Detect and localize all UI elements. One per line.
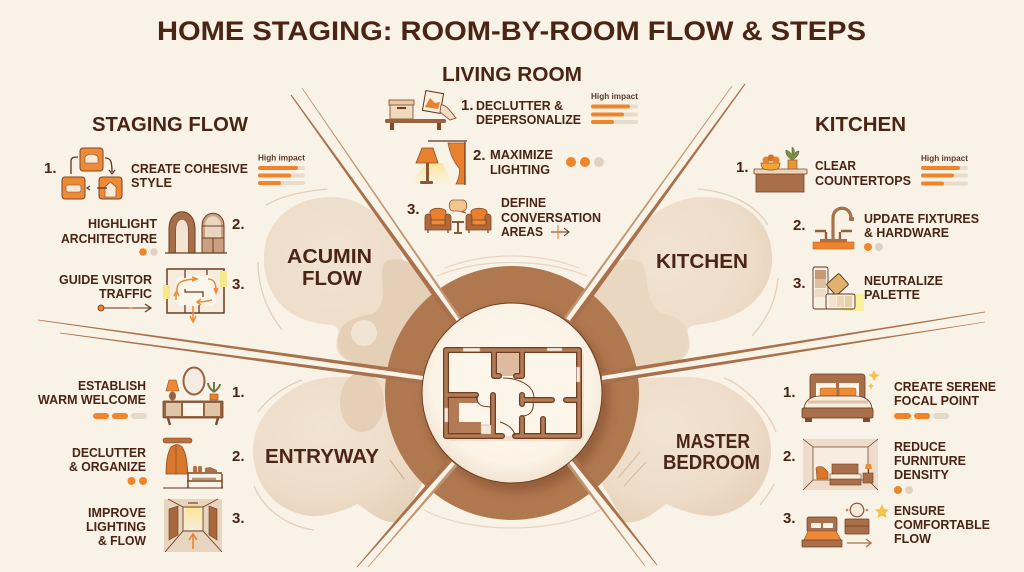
icon: arch and cabinet [165,212,227,253]
blob: Acumin Flow zone [258,189,436,372]
step 3: define conversation areas [407,195,601,239]
icon: bed with sparkles [802,370,880,422]
step 3: define conversation areas: CONVERSATION [501,210,601,225]
step 2: reduce furniture density [783,439,966,494]
step 1: create cohesive style [44,148,305,199]
impact meter: high [258,152,305,185]
step 3: neutralize palette: PALETTE [864,287,920,302]
step 3: guide visitor traffic: TRAFFIC [99,286,153,301]
step 1: create cohesive style: 1. [44,160,57,177]
step 1: declutter and depersonalize [385,91,638,130]
step 2: declutter and organize [69,438,245,488]
blob: Kitchen zone [590,189,778,372]
step 2: maximize lighting: LIGHTING [490,162,550,177]
arrow [551,225,569,239]
step 2: update fixtures and hardware: UPDATE FIXTURES [864,211,979,226]
label: Master Bedroom: BEDROOM [663,451,760,474]
step 3: improve lighting and flow: 3. [232,510,245,527]
step 1: establish warm welcome: 1. [232,384,245,401]
icon: floor plan [444,348,584,441]
panel: staging flow [44,113,305,322]
spokes [38,82,985,567]
step 2: update fixtures and hardware [793,208,979,251]
panel: master bedroom [783,370,996,547]
step 3: improve lighting and flow: & FLOW [98,533,147,548]
icon: uncluttered room [803,439,878,490]
label: Entryway: ENTRYWAY [265,445,379,468]
step 3: improve lighting and flow [86,499,245,552]
step 3: ensure comfortable flow: COMFORTABLE [894,517,990,532]
step 1: create serene focal point: CREATE SERENE [894,379,996,394]
step 1: clear countertops: 1. [736,159,749,176]
icon: coat and shoe rack [163,438,223,488]
step 2: maximize lighting: 2. [473,147,486,164]
step 2: reduce furniture density: DENSITY [894,467,949,482]
step 2: declutter and organize: DECLUTTER [72,445,147,460]
label: Acumin Flow [287,245,372,290]
label: Acumin Flow: ACUMIN [287,245,372,268]
rating pills [894,413,949,419]
step 1: clear countertops [736,147,968,192]
heading: staging flow: STAGING FLOW [92,113,249,136]
icon: faucet [813,208,854,249]
step 2: highlight architecture: 2. [232,216,245,233]
label: Master Bedroom: MASTER [676,430,750,453]
rating dots [894,486,913,494]
step 1: establish warm welcome: ESTABLISH [78,378,146,393]
icon: lamp and curtain [410,141,467,185]
impact meter: high: High impact [258,152,305,162]
icon: traffic floor plan [163,269,227,322]
outer ring [385,266,639,520]
step 1: create serene focal point: 1. [783,384,796,401]
step 3: ensure comfortable flow: ENSURE [894,503,945,518]
step 3: define conversation areas: AREAS [501,224,543,239]
step 3: neutralize palette: NEUTRALIZE [864,273,943,288]
step 3: improve lighting and flow: LIGHTING [86,519,146,534]
icon: three furniture tiles [62,148,122,199]
icon: console with mirror, lamp and plant [163,368,223,425]
step 2: highlight architecture: ARCHITECTURE [61,231,157,246]
step 3: neutralize palette: 3. [793,275,806,292]
icon: bed, dresser, mirror and arrow [802,503,889,547]
step 2: declutter and organize: 2. [232,448,245,465]
step 2: maximize lighting: MAXIMIZE [490,147,553,162]
icon: box, photo and hand on shelf [385,91,456,130]
arrow [98,304,151,312]
step 3: define conversation areas: DEFINE [501,195,546,210]
step 1: create cohesive style: STYLE [131,175,172,190]
step 2: reduce furniture density: 2. [783,448,796,465]
step 3: ensure comfortable flow: 3. [783,510,796,527]
impact meter: high [921,153,968,186]
label: Acumin Flow: FLOW [302,267,363,290]
guide arcs [424,256,600,528]
step 1: clear countertops: COUNTERTOPS [815,173,911,188]
rating dots [864,243,883,251]
step 3: improve lighting and flow: IMPROVE [88,505,146,520]
step 1: clear countertops: CLEAR [815,158,857,173]
step 2: highlight architecture: HIGHLIGHT [88,216,157,231]
icon: armchairs with speech bubble [425,200,491,233]
label: Master Bedroom [663,430,760,474]
panel: kitchen [736,113,979,311]
step 1: create cohesive style: CREATE COHESIVE [131,161,248,176]
impact meter: high: High impact [591,91,638,101]
label: Kitchen: KITCHEN [656,250,748,273]
step 1: declutter and depersonalize: 1. [461,97,474,114]
panel: living room [385,63,638,239]
rating dots [566,157,604,167]
step 1: create serene focal point: FOCAL POINT [894,393,979,408]
heading: kitchen: KITCHEN [815,113,906,136]
ring shadow [425,308,609,492]
central hub diagram [38,82,985,567]
step 1: create serene focal point [783,370,996,422]
icon: bright hallway [164,499,222,552]
step 3: guide visitor traffic [59,269,245,322]
step 3: ensure comfortable flow: FLOW [894,531,932,546]
step 2: update fixtures and hardware: 2. [793,217,806,234]
blob: Master Bedroom zone [594,377,776,522]
rating pills [93,413,147,419]
rating dots [139,248,158,256]
step 1: establish warm welcome: WARM WELCOME [38,392,146,407]
step 3: neutralize palette [793,267,943,311]
step 2: maximize lighting [410,141,604,185]
heading: living room: LIVING ROOM [442,63,582,86]
step 3: define conversation areas: 3. [407,201,420,218]
step 3: guide visitor traffic: 3. [232,276,245,293]
icon: counter with fruit bowl and plant [754,147,807,192]
icon: colour swatches [813,267,864,311]
panel: entryway [38,368,245,552]
step 2: reduce furniture density: FURNITURE [894,453,966,468]
blob: Entryway zone [253,372,430,530]
step 1: declutter and depersonalize: DECLUTTER & [476,98,563,113]
impact meter: high: High impact [921,153,968,163]
inner hub circle [422,303,602,483]
impact meter: high [591,91,638,124]
step 2: highlight architecture [61,212,245,256]
step 2: reduce furniture density: REDUCE [894,439,946,454]
step 1: establish warm welcome [38,368,245,425]
step 3: guide visitor traffic: GUIDE VISITOR [59,272,153,287]
step 2: update fixtures and hardware: & HARDWARE [864,225,949,240]
title: HOME STAGING: ROOM-BY-ROOM FLOW & STEPS [157,16,866,46]
step 2: declutter and organize: & ORGANIZE [69,459,146,474]
rating dots [128,477,147,485]
step 3: ensure comfortable flow [783,503,990,547]
step 1: declutter and depersonalize: DEPERSONALIZE [476,112,581,127]
